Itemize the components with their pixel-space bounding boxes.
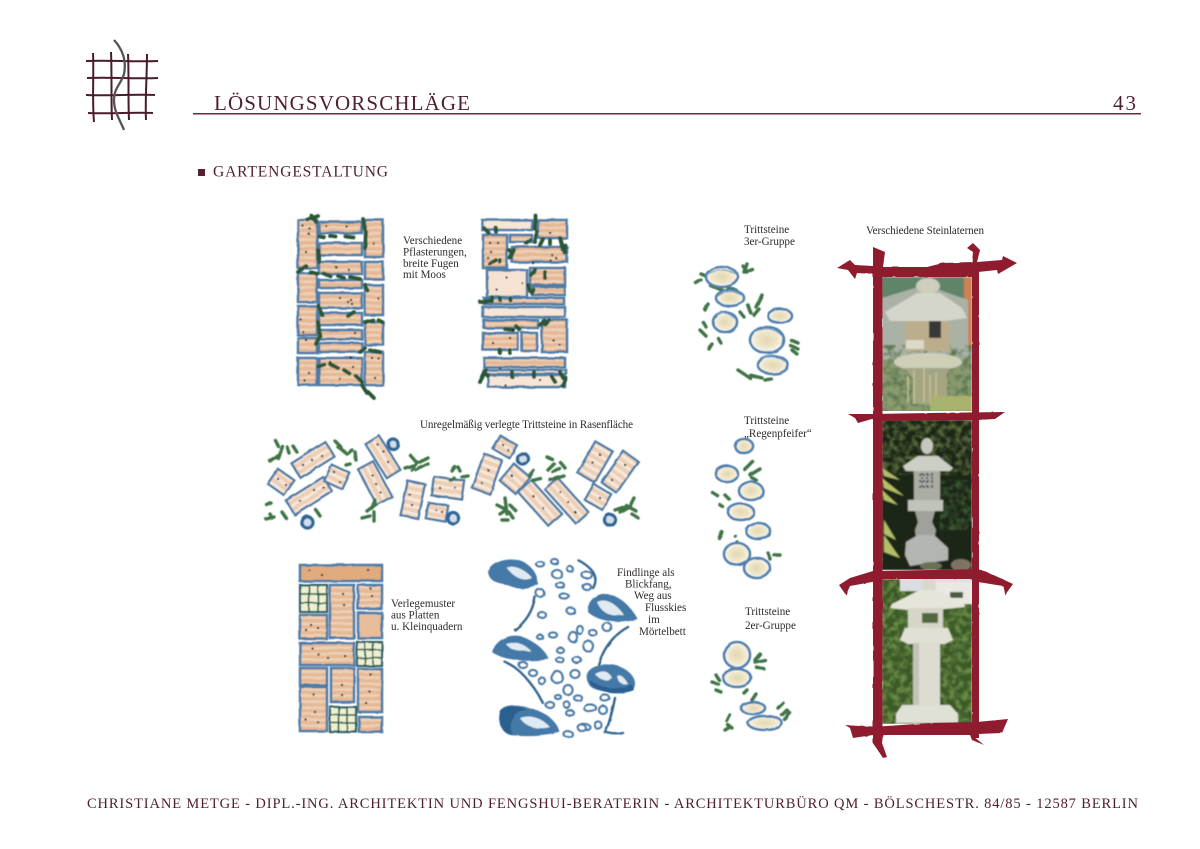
- caption: laying pattern: Verlegemuster: [391, 598, 455, 610]
- caption: stone lanterns: Verschiedene Steinlaternen: [866, 225, 984, 237]
- bottom bar: [845, 719, 1008, 758]
- logo: woven grid with curved line: [86, 40, 158, 130]
- caption: stepping stones group of 2: 2er-Gruppe: [745, 620, 796, 632]
- caption: stepping stones Regenpfeifer: [744, 415, 812, 440]
- caption: boulders: Mörtelbett: [639, 626, 687, 638]
- sketch: stepping stones Regenpfeifer: [712, 439, 780, 578]
- caption: laying pattern: [391, 598, 463, 633]
- sketch: stepping stones group of 3: [696, 264, 798, 380]
- caption: paving: mit Moos: [403, 269, 446, 281]
- caption: stepping stones group of 2: Trittsteine: [745, 606, 790, 618]
- caption: paving: Pflasterungen,: [403, 246, 467, 258]
- section heading: Gartengestaltung: GARTENGESTALTUNG: [213, 164, 388, 180]
- sketch: boulders and river gravel path: [488, 560, 637, 737]
- sketch: paving pattern 1 with moss: [298, 216, 383, 398]
- header rule: [193, 113, 1141, 114]
- third bar with drooping ends: [839, 569, 1013, 595]
- caption: stepping stones group of 2: [745, 606, 796, 632]
- sketch: slabs and small cobble pattern: [300, 565, 382, 732]
- right post: [972, 262, 979, 738]
- caption: laying pattern: u. Kleinquadern: [391, 621, 463, 633]
- caption: boulders: Weg aus: [634, 590, 672, 602]
- caption: stepping stones group of 3: 3er-Gruppe: [744, 236, 795, 248]
- title: LÖSUNGSVORSCHLÄGE: [214, 91, 470, 115]
- page number: 43: [1113, 91, 1136, 115]
- sketch: paving pattern 2 with moss: [480, 215, 567, 387]
- caption: paving: [403, 235, 467, 281]
- photo: first stone lantern: [882, 277, 972, 412]
- caption: boulders: Flusskies: [645, 602, 686, 614]
- caption: stepping stones Regenpfeifer: „Regenpfeifer“: [744, 428, 812, 440]
- photo: third stone lantern: [882, 578, 972, 724]
- caption: paving: breite Fugen: [403, 258, 459, 270]
- caption: boulders: Blickfang,: [625, 578, 672, 590]
- caption: stepping stones group of 3: [744, 224, 795, 248]
- second bar: [848, 412, 1005, 423]
- caption: irregular stepping stones: Unregelmäßig verlegte Trittsteine in Rasenfläche: [420, 419, 633, 431]
- footer: CHRISTIANE METGE - DIPL.-ING. ARCHITEKTIN UND FENGSHUI-BERATERIN - ARCHITEKTURBÜRO QM - BÖLSCHESTR. 84/85 - 12587 BERLIN: [87, 795, 1139, 812]
- caption: stepping stones group of 3: Trittsteine: [744, 224, 789, 236]
- caption: boulders: [617, 567, 687, 638]
- top bar: [837, 243, 1017, 279]
- caption: boulders: im: [648, 614, 660, 626]
- lantern frame: brush-stroke torii bars and posts: [837, 243, 1017, 758]
- sketch: stepping stones group of 2: [712, 642, 789, 730]
- caption: boulders: Findlinge als: [617, 567, 675, 579]
- caption: laying pattern: aus Platten: [391, 610, 440, 622]
- caption: stepping stones Regenpfeifer: Trittsteine: [744, 415, 789, 427]
- caption: paving: Verschiedene: [403, 235, 462, 247]
- photo: second stone lantern: [882, 420, 972, 571]
- sketch: irregular stepping stones in lawn: [266, 436, 638, 528]
- left post: [873, 262, 882, 738]
